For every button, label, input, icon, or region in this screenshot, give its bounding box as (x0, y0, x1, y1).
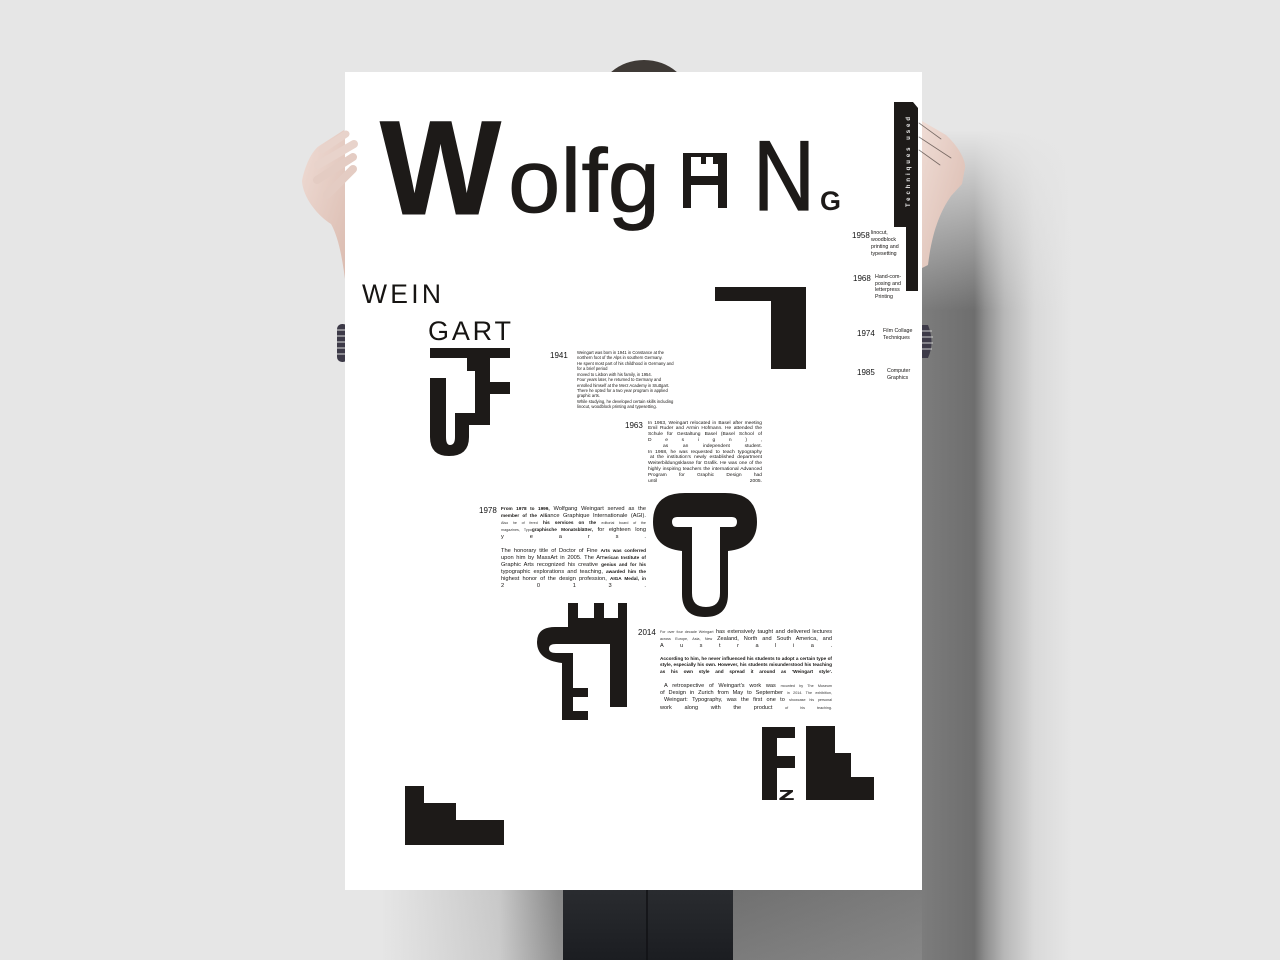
text block: 1941 biography: moved to Lisbon with his family, in 1954. (577, 372, 652, 377)
technique 1968 description: letterpress (875, 287, 900, 293)
text block: 1963 biography: highly inspiring teachers the international Advanced (648, 467, 762, 472)
text block: 1941 biography: Four years later, he returned to Germany and (577, 377, 661, 382)
text block: 1963 biography: D e s i g n ) , (648, 438, 762, 443)
text block: 1963 biography: In 1968, he was requested to teach typography (648, 450, 762, 455)
text block: 1941 biography: for a brief period (577, 366, 608, 371)
technique 1985 year: 1985 (857, 368, 875, 377)
text block: 1941 biography: linocut, woodblock printing and typesetting. (577, 404, 657, 409)
text block: 1963 biography: Weiterbildungsklasse für Grafik. He was one of the (648, 461, 762, 466)
text block: 1963 biography (648, 420, 762, 484)
text block: 1941 biography: He spent most part of his childhood in Germany and (577, 361, 674, 366)
text block: 1978 career and awards: Also he of fered his services on the editorial board of the (501, 520, 646, 525)
technique 1968 description: Printing (875, 294, 893, 300)
text block: 1941 biography: northern foot of the Alps in southern Germany. (577, 355, 663, 360)
subtitle GART: GART (428, 316, 511, 346)
year 1978: 1978 (479, 506, 497, 515)
text block: 1978 career and awards: upon him by MassArt in 2005. The American Institute of (501, 555, 646, 561)
text block: 1941 biography: enrolled himself at the Merz Academy in Stuttgart. (577, 383, 669, 388)
technique 1958 description (871, 230, 899, 257)
text block: 1978 career and awards: From 1978 to 1999, Wolfgang Weingart served as the (501, 506, 646, 512)
technique 1958 description: woodblock (871, 237, 896, 243)
year 1941: 1941 (550, 351, 568, 360)
text block: 1978 career and awards: y e a r s . (501, 534, 646, 540)
title letter W: W (380, 94, 501, 243)
text block: 2014 teaching and retrospective (660, 629, 832, 711)
text block: 1941 biography: While studying, he developed certain skills including (577, 399, 673, 404)
vertical bar: techniques used (894, 102, 918, 291)
text block: 1963 biography: Emil Ruder and Armin Hofmann. He attended the (648, 426, 762, 431)
text block: 1978 career and awards: Graphic Arts recognized his creative genius and for his (501, 562, 646, 568)
technique 1974 description: Film Collage (883, 328, 912, 334)
text block: 2014 teaching and retrospective: Weingart: Typography, was the first one to showcase his personal (664, 697, 832, 703)
text block: 2014 teaching and retrospective: For over four decade Weingart has extensively taught and delivered lectures (660, 629, 832, 635)
text block: 1978 career and awards (501, 506, 646, 589)
technique 1968 year: 1968 (853, 274, 871, 283)
year 1963: 1963 (625, 421, 643, 430)
technique 1985 description: Computer (887, 368, 910, 374)
text block: 1963 biography: Schule für Gestaltung Basel (Basel School of (648, 432, 762, 437)
title letter N: N (753, 120, 815, 231)
glyph: F with small z: z (778, 784, 795, 804)
glyph: UF ligature (430, 348, 510, 456)
technique 1968 description (875, 274, 901, 300)
title letters olfg: olfg (508, 132, 660, 232)
technique 1974 year: 1974 (857, 329, 875, 338)
title letter G: G (820, 186, 841, 216)
custom crenellated letter A (683, 153, 727, 208)
text block: 1941 biography: There he opted for a two year program in applied (577, 388, 668, 393)
text block: 1941 biography: graphic arts. (577, 393, 600, 398)
text block: 1963 biography: In 1963, Weingart relocated in Basel after meeting (648, 420, 762, 426)
technique 1958 year: 1958 (852, 231, 870, 240)
technique 1974 description (883, 328, 912, 341)
technique 1958 description: printing and (871, 244, 899, 250)
text block: 1941 biography (577, 350, 674, 409)
technique 1968 description: posing and (875, 280, 901, 286)
technique 1968 description: Hand-com- (875, 274, 901, 280)
text block: 2014 teaching and retrospective: A u s t r a l i a . (660, 643, 832, 649)
text block: 1978 career and awards: member of the Alliance Graphique Internationale (AGI). (501, 513, 646, 519)
text block: 1963 biography: Program for Graphic Design had (648, 473, 762, 478)
text block: 2014 teaching and retrospective: as his own style and spread it around as 'Weingart style'. (660, 669, 832, 674)
text block: 1978 career and awards: typographic explorations and teaching, awarded him the (501, 569, 646, 575)
vertical bar: techniques used: Techniques used (906, 117, 912, 207)
glyph: F with small z (762, 727, 795, 804)
glyph: stepped L right (806, 726, 874, 800)
text block: 1978 career and awards: magazines, Typographische Monatsblätter, for eighteen long (501, 527, 646, 533)
year 2014: 2014 (638, 628, 656, 637)
subtitle WEIN: WEIN (362, 279, 441, 309)
text block: 2014 teaching and retrospective: According to him, he never influenced his students to adopt a certain type of (660, 656, 832, 661)
glyph: castle E (537, 603, 627, 720)
text block: 1978 career and awards: 2 0 1 3 . (501, 583, 646, 589)
text block: 2014 teaching and retrospective: across Europe, Asia, New Zealand, North and South America, and (660, 636, 832, 642)
text block: 1963 biography: at the institution's newly established department (650, 455, 762, 460)
text block: 1963 biography: as an independent student. (663, 444, 762, 449)
text block: 2014 teaching and retrospective: A retrospective of Weingart's work was mounted by The Museum (664, 683, 832, 689)
technique 1958 description: typesetting (871, 251, 897, 257)
text block: 2014 teaching and retrospective: of Design in Zurich from May to September in 2014. The exhibition, (660, 690, 832, 696)
glyph: corner L top right (715, 287, 806, 369)
text block: 1978 career and awards: highest honor of the design profession, AIGA Medal, in (501, 576, 646, 582)
glyph: stepped L bottom left (405, 786, 504, 845)
text block: 2014 teaching and retrospective: work along with the product of his teaching. (660, 705, 832, 711)
text block: 1963 biography: until 2005. (648, 479, 762, 484)
text block: 1978 career and awards: The honorary title of Doctor of Fine Arts was conferred (501, 548, 646, 554)
technique 1985 description: Graphics (887, 375, 908, 381)
technique 1985 description (887, 368, 910, 381)
glyph: large T (653, 493, 757, 617)
technique 1974 description: Techniques (883, 335, 910, 341)
technique 1958 description: linocut, (871, 230, 888, 236)
text block: 2014 teaching and retrospective: style, especially his own. However, his students misunderstood his teaching (660, 662, 832, 667)
hands: fingers over the poster (317, 123, 951, 195)
text block: 1941 biography: Weingart was born in 1941 in Constance at the (577, 350, 664, 355)
